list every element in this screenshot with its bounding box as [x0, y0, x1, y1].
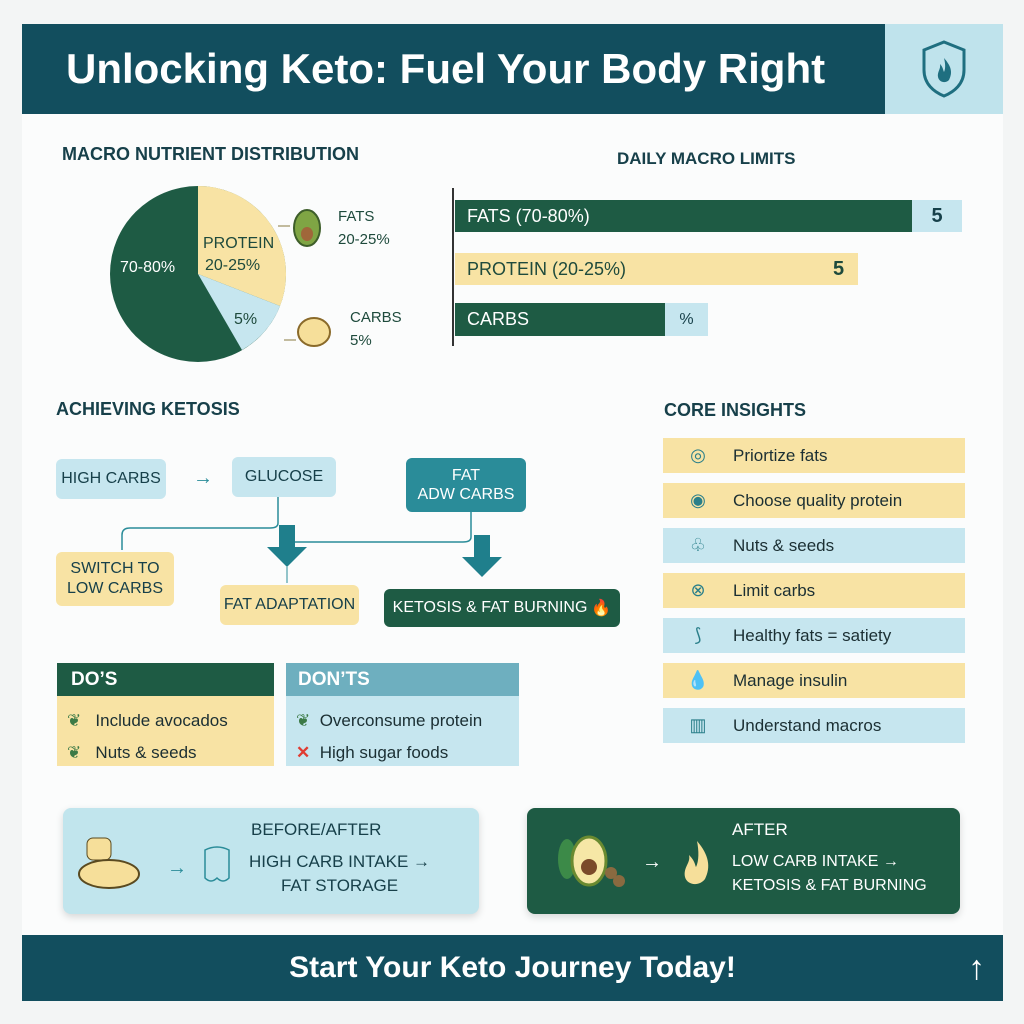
text: Healthy fats = satiety: [733, 626, 891, 644]
panel: after: LOW CARB INTAKE →: [732, 853, 899, 870]
box: fat adw carbs: ADW CARBS: [418, 486, 514, 503]
bar chart: %: [679, 311, 694, 328]
box: fat adw carbs: FAT: [452, 467, 480, 484]
footer bar: Start Your Keto Journey Today!: [289, 951, 736, 984]
panel: before: FAT STORAGE: [281, 876, 398, 895]
box: ketosis: KETOSIS & FAT BURNING: [393, 599, 587, 616]
panel: before: BEFORE/AFTER: [251, 820, 381, 839]
box: glucose: [232, 457, 336, 497]
pie chart: PROTEIN: [203, 235, 274, 252]
text: Nuts & seeds: [733, 536, 834, 554]
panel: dos: [57, 663, 274, 766]
text: ⟆: [694, 625, 702, 645]
text: ◉: [690, 490, 706, 510]
box: high carbs: HIGH CARBS: [61, 470, 161, 487]
panel: after: KETOSIS & FAT BURNING: [732, 877, 927, 894]
flow diagram: [56, 457, 620, 627]
icon: up arrow: ↑: [968, 949, 985, 987]
pie chart: 20-25%: [205, 257, 260, 274]
box: ketosis: 🔥: [591, 600, 611, 617]
heading: core insights: CORE INSIGHTS: [664, 400, 806, 420]
box: fat adaptation: FAT ADAPTATION: [224, 596, 355, 613]
panel: after: →: [642, 851, 662, 873]
panel: donts: [286, 663, 519, 766]
bar chart: [452, 188, 962, 346]
icon: shield flame: [885, 24, 1003, 114]
panel: before: →: [167, 857, 187, 879]
box: high carbs: [56, 459, 166, 499]
panel: after: AFTER: [732, 820, 788, 839]
panel: after: [527, 808, 960, 914]
text: Limit carbs: [733, 580, 815, 600]
pie chart: FATS: [338, 208, 374, 225]
bar chart: 5: [833, 258, 844, 280]
box: switch to low carbs: [56, 552, 174, 606]
heading: daily limits: DAILY MACRO LIMITS: [617, 149, 796, 168]
panel: donts: ✕ High sugar foods: [296, 743, 448, 762]
page panel: [22, 114, 1003, 935]
insights list: [663, 438, 965, 743]
box: ketosis: [384, 589, 620, 627]
heading: macro distribution: MACRO NUTRIENT DISTRIBUTION: [62, 144, 359, 164]
panel: donts: ❦ Overconsume protein: [296, 711, 482, 730]
pie chart: CARBS: [350, 309, 402, 326]
connectors: [121, 497, 502, 583]
text: ◎: [690, 445, 706, 465]
bar chart: PROTEIN (20-25%): [467, 259, 626, 279]
pie chart: 70-80%: [120, 259, 175, 276]
text: ⊗: [690, 580, 706, 600]
bar chart: 5: [931, 205, 943, 227]
pie chart: 20-25%: [338, 231, 390, 248]
footer bar: [22, 935, 1003, 1001]
pie chart: 5%: [234, 311, 257, 328]
panel: donts: DON’TS: [298, 669, 370, 690]
box: glucose: GLUCOSE: [245, 468, 323, 485]
box: fat adw carbs: [406, 458, 526, 512]
panel: dos: ❦ Include avocados: [67, 711, 228, 730]
panel: dos: DO’S: [71, 669, 117, 690]
heading: achieving ketosis: ACHIEVING KETOSIS: [56, 399, 240, 419]
pie chart: [110, 186, 402, 362]
pie chart: 5%: [350, 332, 372, 349]
panel: before: HIGH CARB INTAKE →: [249, 852, 430, 871]
bar chart: CARBS: [467, 309, 529, 329]
text: ▥: [689, 715, 706, 735]
text: Manage insulin: [733, 670, 847, 690]
title bar: [22, 24, 885, 114]
box: fat adaptation: [220, 585, 359, 625]
panel: dos: ❦ Nuts & seeds: [67, 743, 197, 762]
panel: before: [63, 808, 479, 914]
text: 💧: [687, 670, 709, 690]
title bar: Unlocking Keto: Fuel Your Body Right: [66, 45, 825, 92]
text: Understand macros: [733, 716, 881, 734]
bar chart: FATS (70-80%): [467, 206, 590, 226]
text: Choose quality protein: [733, 490, 902, 510]
box: switch to low carbs: SWITCH TO: [70, 560, 160, 577]
arrow: →: [193, 467, 213, 489]
text: ♧: [690, 535, 706, 555]
box: switch to low carbs: LOW CARBS: [67, 580, 163, 597]
text: Priortize fats: [733, 446, 827, 464]
